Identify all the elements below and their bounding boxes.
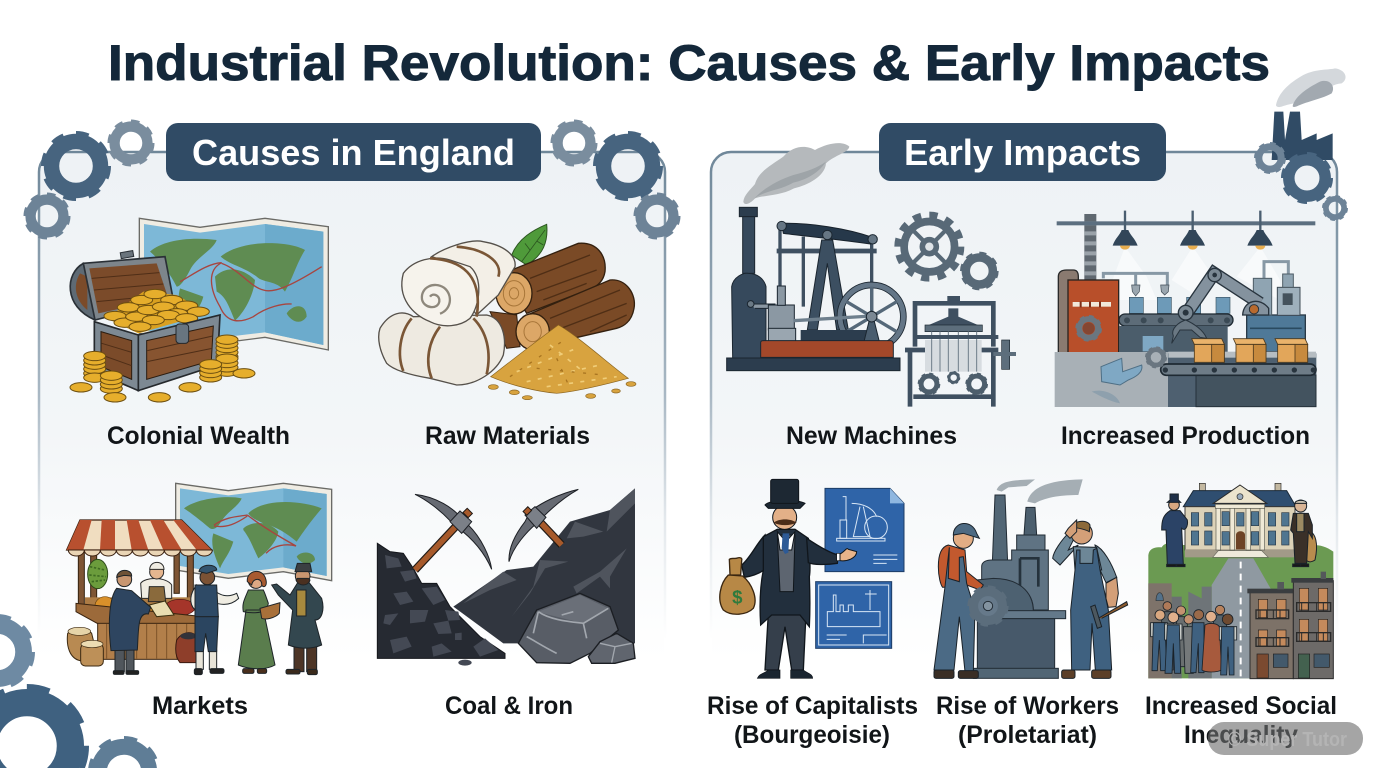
- heading: early impacts: [879, 123, 1166, 181]
- label: rise of workers: [936, 692, 1119, 749]
- icon: gears right: [554, 123, 677, 236]
- label: increased social inequality: Increased Social: [1145, 692, 1337, 720]
- label: raw materials: Raw Materials: [425, 422, 590, 450]
- icon: gears top right: [1256, 144, 1346, 219]
- panel: causes in England: [27, 123, 677, 720]
- heading: causes in England: Causes in England: [192, 132, 515, 173]
- illustration: rise of capitalists: [720, 479, 904, 678]
- illustration: colonial wealth: [70, 218, 328, 402]
- heading: causes in England: [166, 123, 541, 181]
- label: coal and iron: Coal & Iron: [445, 692, 573, 720]
- illustration: coal and iron: [377, 488, 635, 666]
- icon: gears left: [27, 123, 151, 236]
- icon: factory and smoke: [1272, 68, 1346, 160]
- label: rise of capitalists: (Bourgeoisie): [734, 721, 890, 749]
- label: new machines: New Machines: [786, 422, 957, 450]
- illustration: rise of capitalists: $: [732, 586, 743, 607]
- label: rise of capitalists: Rise of Capitalists: [707, 692, 918, 720]
- heading: early impacts: Early Impacts: [904, 132, 1141, 173]
- illustration: increased production: [1055, 211, 1316, 407]
- illustration: raw materials: [379, 224, 636, 400]
- label: colonial wealth: Colonial Wealth: [107, 422, 290, 450]
- title: Industrial Revolution: Causes & Early Impacts: [108, 35, 1270, 91]
- icon: gears bottom left: [0, 619, 155, 768]
- label: increased social inequality: Inequality: [1184, 721, 1298, 749]
- illustration: new machines: [727, 143, 1016, 407]
- illustration: increased social inequality: [1148, 483, 1333, 679]
- illustration: rise of workers: [934, 479, 1128, 678]
- label: rise of workers: (Proletariat): [958, 721, 1097, 749]
- label: markets: Markets: [152, 692, 248, 720]
- label: increased social inequality: [1145, 692, 1337, 749]
- label: rise of workers: Rise of Workers: [936, 692, 1119, 720]
- watermark: [1208, 722, 1363, 755]
- watermark: © Super Tutor: [1228, 729, 1347, 751]
- label: increased production: Increased Production: [1061, 422, 1310, 450]
- illustration: markets: [67, 483, 332, 675]
- panel: early impacts: [707, 68, 1346, 749]
- label: rise of capitalists: [707, 692, 918, 749]
